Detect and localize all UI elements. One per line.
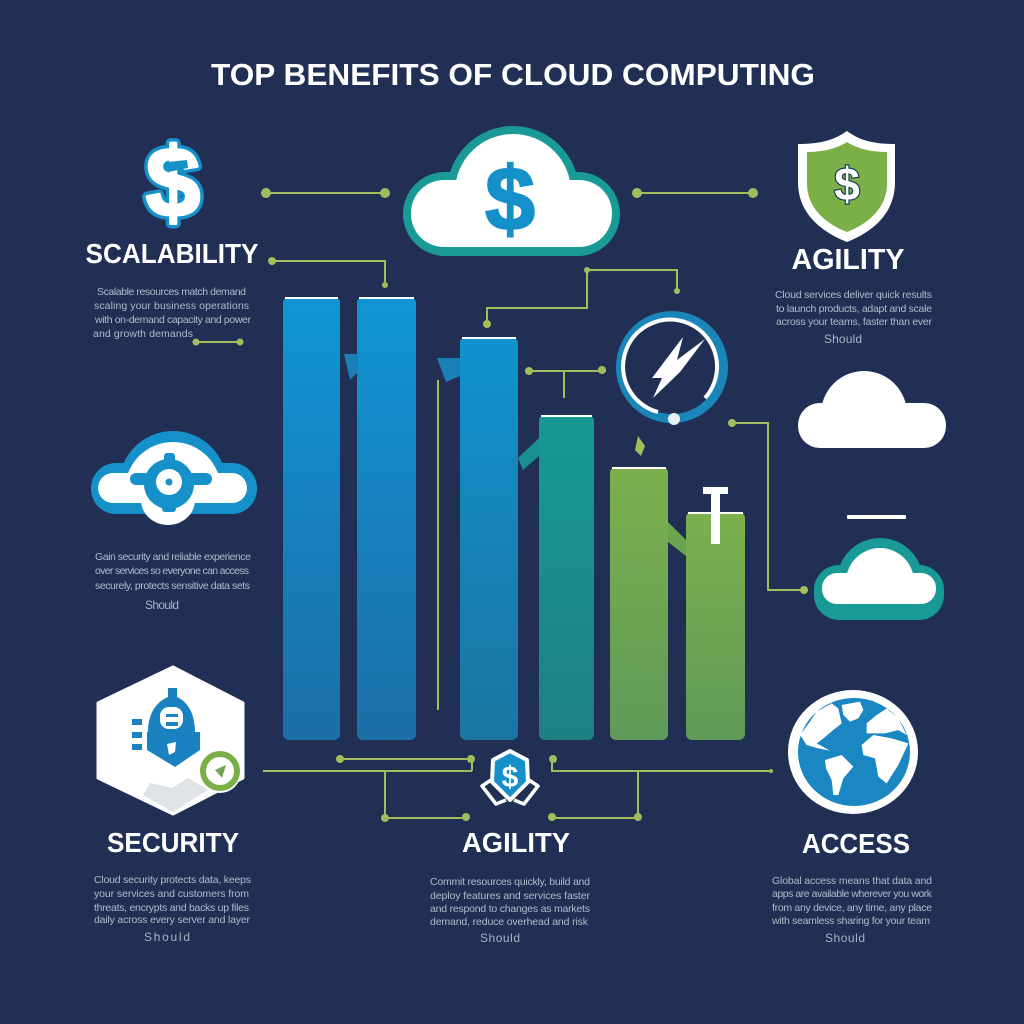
text block: access: apps are available wherever you work bbox=[772, 888, 933, 900]
text block: security: your services and customers from bbox=[94, 888, 249, 900]
text block: cloud gear bbox=[95, 551, 251, 612]
text block: access: from any device, any time, any place bbox=[772, 902, 932, 914]
bar 4 bbox=[539, 415, 594, 740]
text block: agility right: Should bbox=[824, 332, 862, 346]
text block: cloud gear: Should bbox=[145, 598, 179, 612]
text block: scalability bbox=[93, 286, 252, 340]
text block: cloud gear: securely, protects sensitive data sets bbox=[95, 580, 250, 592]
icon: security hexagon bbox=[98, 667, 243, 814]
text block: cloud gear: Gain security and reliable experience bbox=[95, 551, 251, 563]
icon: cloud with dollar: $ bbox=[485, 150, 535, 250]
text block: scalability: with on-demand capacity and power bbox=[94, 314, 252, 326]
bar 6 bbox=[686, 512, 745, 740]
text block: security: daily across every server and layer bbox=[94, 914, 250, 926]
text block: agility centre: Commit resources quickly, build and bbox=[430, 876, 590, 888]
text block: scalability: Scalable resources match demand bbox=[97, 286, 246, 298]
bar 1 bbox=[283, 297, 340, 740]
text block: security: Should bbox=[144, 930, 190, 944]
text block: scalability: scaling your business operations bbox=[94, 300, 249, 312]
text block: agility centre bbox=[430, 876, 590, 945]
text block: agility centre: and respond to changes as markets bbox=[430, 903, 590, 915]
connector lines bbox=[261, 188, 808, 822]
icon: scalability dollar: $ bbox=[146, 127, 200, 237]
text block: security: threats, encrypts and backs up files bbox=[94, 902, 249, 914]
icon: cloud with dollar bbox=[403, 126, 620, 256]
text block: scalability: and growth demands bbox=[93, 328, 193, 340]
heading: agility right: AGILITY bbox=[792, 244, 904, 276]
dash bbox=[847, 515, 906, 519]
text block: agility right: Cloud services deliver quick results bbox=[775, 289, 932, 301]
text block: access: Should bbox=[825, 931, 865, 945]
heading: access: ACCESS bbox=[802, 828, 910, 859]
text block: agility centre: deploy features and services faster bbox=[430, 890, 590, 902]
bar 5 bbox=[610, 467, 668, 740]
heading: scalability: SCALABILITY bbox=[86, 238, 259, 269]
text block: access: Global access means that data and bbox=[772, 875, 932, 887]
heading: security: SECURITY bbox=[107, 827, 239, 858]
heading: agility centre: AGILITY bbox=[462, 827, 570, 858]
text block: access: with seamless sharing for your team bbox=[771, 915, 930, 927]
icon: shield: $ bbox=[834, 158, 860, 210]
icon: cloud gear bbox=[91, 431, 257, 525]
icon: cloud teal bbox=[814, 538, 944, 620]
icon: shield bbox=[798, 131, 895, 242]
title: TOP BENEFITS OF CLOUD COMPUTING bbox=[211, 57, 815, 92]
text block: agility right: across your teams, faster than ever bbox=[776, 316, 932, 328]
icon: dollar hands: $ bbox=[502, 761, 519, 794]
text block: security bbox=[94, 874, 251, 944]
text block: agility centre: Should bbox=[480, 931, 520, 945]
icon: cloud white bbox=[798, 371, 946, 448]
icon: scalability dollar: $ bbox=[146, 127, 200, 237]
icon: globe bbox=[788, 690, 918, 814]
text block: agility centre: demand, reduce overhead and risk bbox=[430, 916, 589, 928]
bar 3 bbox=[460, 337, 518, 740]
bar chart bbox=[283, 297, 745, 740]
small connector bbox=[192, 338, 244, 346]
icon: dollar hands bbox=[482, 751, 538, 804]
text block: agility right bbox=[775, 289, 932, 346]
text block: cloud gear: over services so everyone can access bbox=[95, 565, 249, 577]
icon: lightning gauge bbox=[620, 316, 724, 425]
text block: agility right: to launch products, adapt and scale bbox=[776, 303, 932, 315]
text block: access bbox=[771, 875, 933, 945]
text block: security: Cloud security protects data, keeps bbox=[94, 874, 251, 886]
bar 2 bbox=[357, 297, 416, 740]
